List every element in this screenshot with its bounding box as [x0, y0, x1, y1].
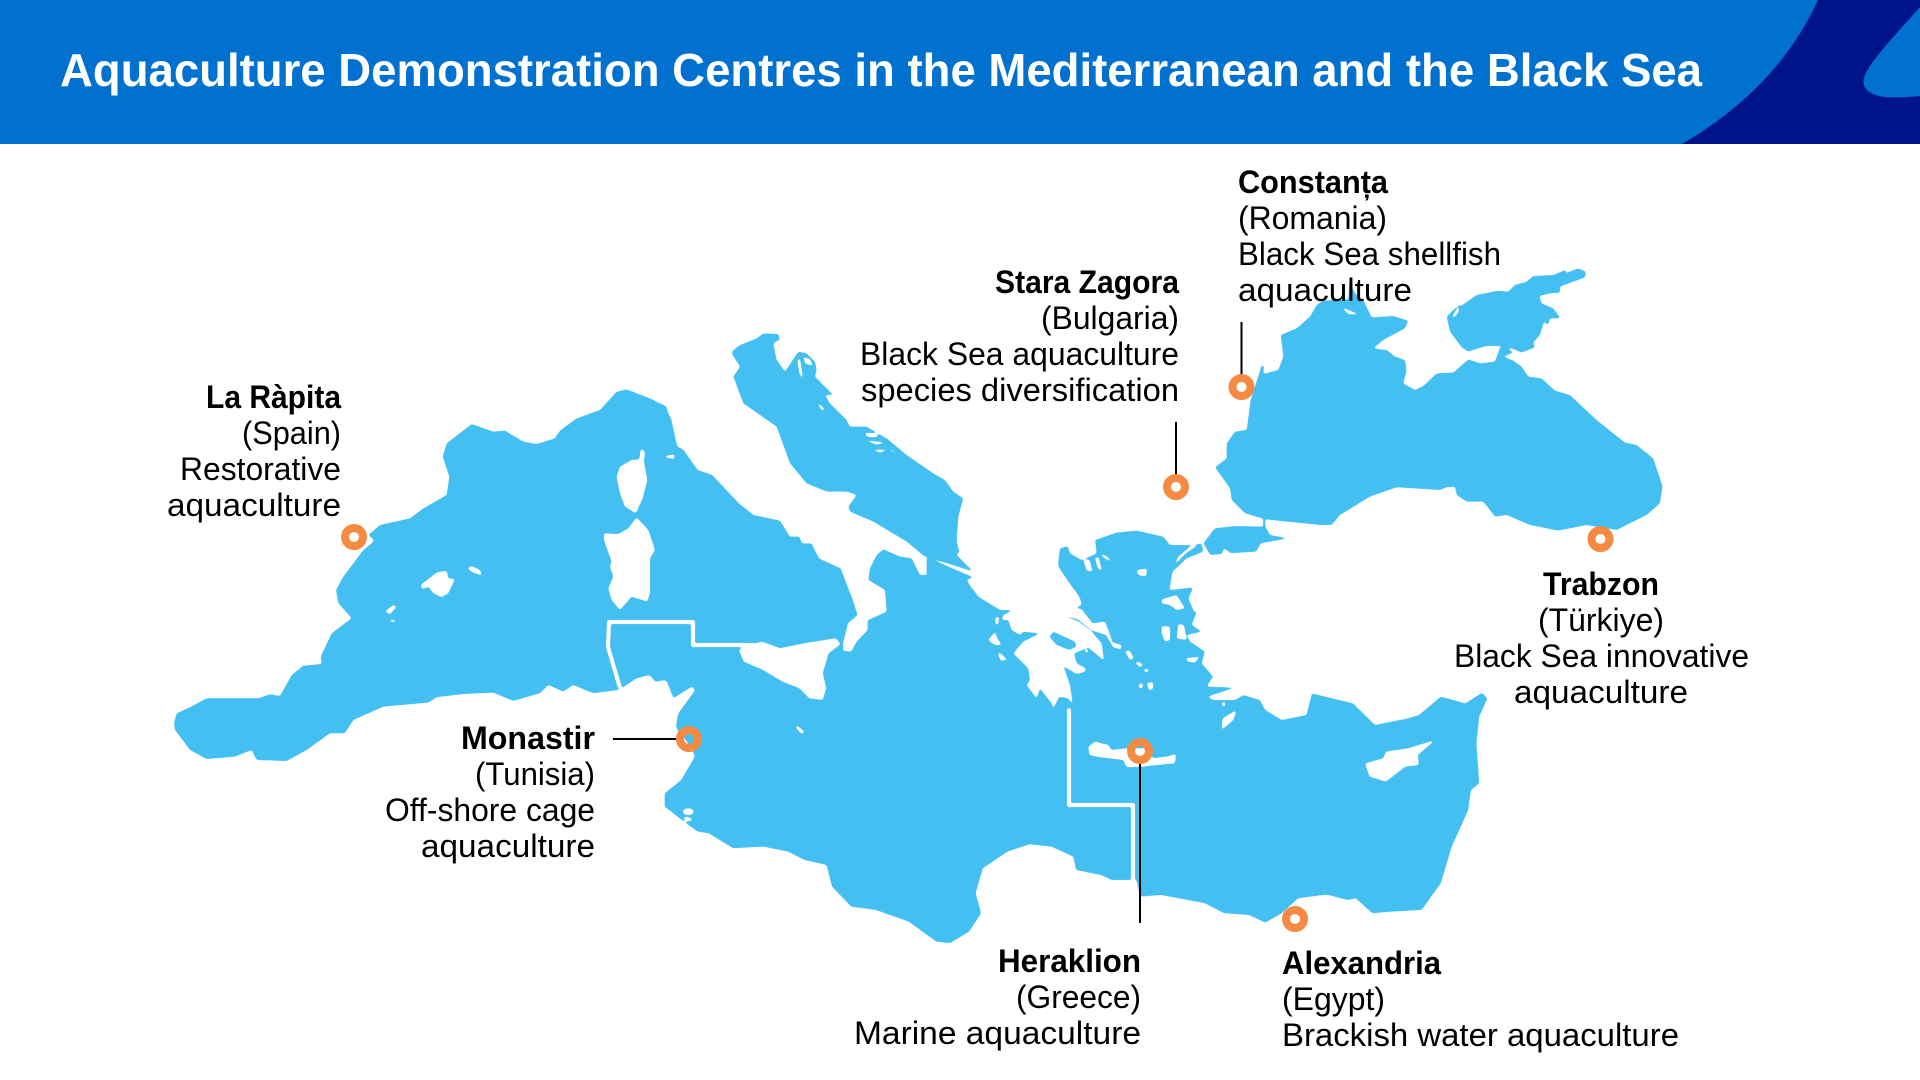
Elba, Sicily and Pantelleria — [665, 454, 841, 734]
pin and leader: Stara Zagora — [1167, 422, 1185, 496]
label: Constanța: Constanța — [1238, 164, 1388, 200]
label: Alexandria: Alexandria — [1282, 945, 1441, 981]
label: Stara Zagora: Black Sea aquaculture — [860, 336, 1179, 372]
label: La Ràpita: (Spain) — [242, 415, 341, 451]
pin and leader: Heraklion — [1131, 742, 1149, 923]
Tyrrhenian Sea and Strait of Sicily — [649, 402, 858, 800]
Ionian Sea upper part — [868, 549, 1013, 620]
label: Trabzon — [1454, 566, 1749, 710]
label: Heraklion: (Greece) — [1016, 979, 1141, 1015]
label: Alexandria — [1282, 945, 1679, 1053]
label: Monastir: aquaculture — [421, 828, 595, 864]
Djerba and Malta — [683, 725, 805, 822]
Aegean Sea — [1058, 531, 1203, 623]
header banner — [0, 0, 1920, 144]
pin: Trabzon — [1592, 530, 1610, 548]
Adriatic islets — [797, 357, 980, 594]
label: La Ràpita: La Ràpita — [206, 379, 341, 415]
label: Alexandria: (Egypt) — [1282, 981, 1385, 1017]
label: Constanța: (Romania) — [1238, 200, 1387, 236]
label: Monastir: (Tunisia) — [475, 756, 595, 792]
Adriatic Sea — [732, 333, 973, 572]
pin and leader: Constanța — [1232, 322, 1250, 396]
eastern Mediterranean Sea — [665, 620, 1487, 943]
Greek islands — [988, 607, 1122, 661]
Gulf of Corinth — [1049, 632, 1077, 650]
western Mediterranean — [174, 389, 677, 761]
map of the Mediterranean and the Black Sea — [160, 255, 1680, 965]
pin: La Ràpita — [345, 528, 363, 546]
Crimea and Azov inlets — [1341, 305, 1459, 317]
label: Monastir: Monastir — [461, 720, 595, 756]
label: Trabzon: (Türkiye) — [1538, 602, 1664, 638]
islands of the Aegean — [1083, 545, 1237, 767]
label: Heraklion — [854, 943, 1141, 1051]
label: Heraklion: Marine aquaculture — [854, 1015, 1141, 1051]
label: Alexandria: Brackish water aquaculture — [1282, 1017, 1679, 1053]
Sea of Marmara — [1203, 519, 1288, 555]
label: Constanța — [1238, 164, 1501, 308]
pin and leader: Monastir — [613, 730, 698, 748]
label: Monastir: Off-shore cage — [385, 792, 595, 828]
label: Stara Zagora: species diversification — [861, 372, 1179, 408]
label: Constanța: aquaculture — [1238, 272, 1412, 308]
Black Sea — [1215, 281, 1663, 531]
pin: Alexandria — [1286, 910, 1304, 928]
label: Heraklion: Heraklion — [998, 943, 1141, 979]
Sea of Azov — [1447, 268, 1586, 353]
label: La Ràpita: aquaculture — [167, 487, 341, 523]
label: Monastir — [385, 720, 595, 864]
label: Trabzon: aquaculture — [1514, 674, 1688, 710]
label: Stara Zagora — [860, 264, 1179, 408]
Greece mainland and Peloponnese — [985, 590, 1104, 708]
maritime boundary lines — [608, 622, 1133, 880]
label: Trabzon: Trabzon — [1543, 566, 1659, 602]
label: Stara Zagora: Stara Zagora — [995, 264, 1179, 300]
label: La Ràpita — [167, 379, 341, 523]
label: Stara Zagora: (Bulgaria) — [1041, 300, 1179, 336]
title: Aquaculture Demonstration Centres in the Mediterranean and the Black Sea — [60, 44, 1702, 96]
Cyprus — [1365, 740, 1435, 782]
label: Trabzon: Black Sea innovative — [1454, 638, 1749, 674]
islands of the western Mediterranean — [385, 448, 655, 622]
label: La Ràpita: Restorative — [180, 451, 341, 487]
label: Constanța: Black Sea shellfish — [1238, 236, 1501, 272]
